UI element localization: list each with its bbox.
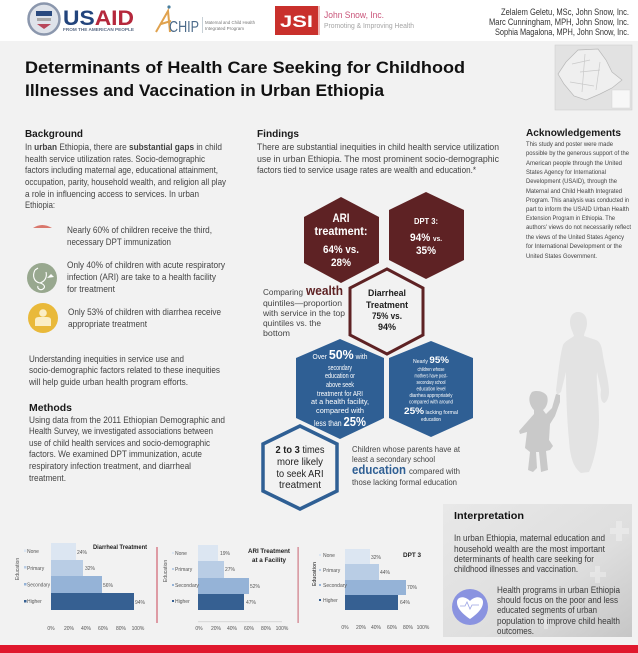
chart: ARI treatment at a facility: 40%: [227, 626, 238, 632]
hexagon: over 50%: secondary: [328, 365, 352, 372]
icon: doctor: [28, 303, 58, 333]
hexagon: 2 to 3 times: 2 to 3 times: [276, 444, 324, 456]
recommendation text: outcomes.: [497, 626, 534, 636]
hexagon: ARI treatment: 64% vs.: [323, 244, 359, 256]
hexagon: diarrheal treatment: 94%: [378, 322, 396, 332]
bullet: DPT: [67, 225, 212, 247]
chart: ARI treatment at a facility: 80%: [261, 626, 272, 632]
chart: DPT 3: None: [323, 553, 335, 559]
acknowledgements text: [526, 141, 631, 260]
icon: stethoscope: [27, 263, 57, 293]
hexagon: nearly 95%: secondary school: [416, 380, 446, 386]
divider line between charts: [298, 547, 299, 623]
hexagon: DPT 3: [389, 192, 464, 279]
recommendation text: educated segments of urban: [497, 605, 597, 615]
background text: occupation, parity, household wealth, and religion all play: [25, 177, 226, 187]
interpretation text: household wealth are the most important: [454, 544, 605, 554]
findings text: There are substantial inequities in child health service utilization: [257, 142, 499, 152]
methods text: use of child health services and socio-demographic: [29, 438, 210, 448]
title: Determinants of Health Care Seeking for Childhood: [25, 58, 465, 77]
hexagon: diarrheal treatment: Treatment: [366, 300, 408, 310]
hexagon: 2 to 3 times: treatment: [279, 479, 321, 491]
interpretation text: determinants of health care seeking for: [454, 554, 594, 564]
chart: DPT 3: 80%: [403, 625, 414, 631]
background text: a role in influencing access to services. In urban: [25, 189, 199, 199]
chart: diarrheal treatment: Secondary: [27, 582, 50, 588]
logo: iCHIP: Maternal and Child Health: [205, 20, 256, 25]
understanding text: Understanding inequities in service use and: [29, 354, 184, 364]
chart: diarrheal treatment: 32%: [85, 566, 96, 572]
chart: ARI treatment at a facility: None: [175, 551, 187, 557]
hexagon: over 50%: above seek: [326, 382, 354, 389]
wealth label: bottom: [263, 328, 290, 338]
chart: diarrheal treatment: None: [27, 549, 39, 555]
title: [25, 58, 465, 100]
bullet: diarrhea: Only 53% of children with diarrhea receive: [68, 307, 221, 317]
bullet: diarrhea: [68, 307, 221, 329]
wealth label: wealth: [305, 283, 343, 298]
logo: JSI: John Snow, Inc.: [324, 10, 384, 21]
heading: findings: Findings: [257, 128, 299, 140]
findings text: factors tied to service usage rates are wealth and education.*: [257, 165, 476, 175]
chart: diarrheal treatment: 94%: [135, 600, 146, 606]
bullet: diarrhea: appropriate treatment: [68, 319, 147, 329]
hexagon: 2 to 3 times: more likely: [277, 456, 324, 468]
chart: diarrheal treatment: 20%: [64, 626, 75, 632]
chart: DPT 3: 64%: [400, 600, 411, 606]
chart: diarrheal treatment: Diarrheal Treatment: [93, 544, 148, 551]
bullet: DPT: necessary DPT immunization: [67, 237, 171, 247]
chart: ARI treatment at a facility: Secondary: [175, 583, 199, 589]
logo: USAID: USAID: [63, 7, 134, 30]
hexagon: over 50%: at a health facility,: [311, 399, 369, 406]
chart: diarrheal treatment: 56%: [103, 583, 114, 589]
hexagon: nearly 95%: education level: [416, 386, 446, 392]
chart: ARI treatment at a facility: Higher: [175, 599, 190, 605]
panel: background: [25, 128, 226, 387]
understanding text: [28, 354, 220, 387]
hexagon: ARI treatment: treatment:: [314, 226, 368, 238]
methods text: respiratory infection treatment, and diarrheal: [29, 461, 191, 471]
methods text: [29, 415, 225, 483]
hexagon: nearly 95%: children whose: [418, 367, 445, 373]
panel: interpretation: [443, 504, 632, 637]
logo: JSI: [275, 6, 414, 35]
understanding text: will help guide urban health program efforts.: [28, 377, 188, 387]
hexagon: over 50%: compared with: [316, 408, 364, 415]
chart: ARI treatment at a facility: 100%: [276, 626, 289, 632]
heading: acknowledgements: Acknowledgements: [526, 127, 621, 139]
panel: methods: [29, 402, 225, 483]
hexagon: nearly 95%: 25% lacking formal: [404, 406, 458, 417]
logo: iCHIP: [156, 5, 256, 36]
hexagon: nearly 95%: education: [421, 417, 441, 423]
hexagon: nearly 95%: Nearly 95%: [413, 355, 450, 366]
chart: diarrheal treatment: 60%: [98, 626, 109, 632]
chart: diarrheal treatment: 0%: [47, 626, 55, 632]
logo: USAID: [28, 4, 134, 34]
hexagon: nearly 95%: compared with around: [409, 400, 453, 406]
logo: JSI: Promoting & Improving Health: [324, 23, 414, 30]
recommendation text: [497, 585, 621, 636]
background text: In urban Ethiopia, there are substantial gaps in child: [25, 142, 222, 152]
education label: those lacking formal education: [352, 477, 457, 487]
methods text: Health Survey, we investigated associations between: [29, 426, 213, 436]
acknowledgements text: Maternal and Child Health Integrated: [526, 188, 622, 195]
acknowledgements text: This study and poster were made: [526, 141, 613, 148]
acknowledgements text: States Agency for International: [526, 169, 606, 176]
chart: DPT 3: Primary: [323, 568, 341, 574]
education label: [352, 444, 461, 487]
chart: diarrheal treatment: 24%: [77, 550, 88, 556]
chart: ARI treatment at a facility: 52%: [250, 584, 261, 590]
chart: diarrheal treatment: Education: [15, 558, 21, 580]
background text: factors including maternal age, educational attainment,: [25, 165, 218, 175]
hexagon: over 50%: treatment for ARI: [317, 391, 363, 398]
acknowledgements text: United States Government.: [526, 253, 597, 260]
acknowledgements text: American people through the United: [526, 160, 622, 167]
bullet: DPT: Nearly 60% of children receive the third,: [67, 225, 212, 235]
wealth label: with service in the top: [262, 308, 345, 318]
logo: JSI: JSI: [280, 12, 313, 31]
hexagon: 2 to 3 times: to seek ARI: [276, 468, 324, 480]
chart: DPT 3: 60%: [387, 625, 398, 631]
chart: ARI treatment at a facility: Primary: [175, 567, 193, 573]
footer bar: [0, 645, 638, 653]
wealth label: quintiles vs. the: [263, 318, 321, 328]
panel: acknowledgements: [526, 127, 631, 260]
chart: DPT 3: 0%: [341, 625, 349, 631]
interpretation text: childhood illnesses and vaccination.: [454, 564, 578, 574]
bullet: ARI: Only 40% of children with acute respiratory: [67, 260, 225, 270]
chart: ARI treatment at a facility: [163, 545, 291, 632]
chart: DPT 3: 70%: [407, 585, 418, 591]
methods text: treatment.: [29, 473, 66, 483]
chart: ARI treatment at a facility: ARI Treatment: [248, 548, 291, 555]
chart: DPT 3: 44%: [380, 570, 391, 576]
chart: DPT 3: [312, 549, 430, 631]
chart: ARI treatment at a facility: 27%: [225, 567, 236, 573]
chart: diarrheal treatment: 80%: [116, 626, 127, 632]
logo: USAID: FROM THE AMERICAN PEOPLE: [63, 27, 134, 32]
icon: immunization (cropped): [33, 225, 52, 228]
bullet: ARI: infection (ARI) are take to a health facility: [67, 272, 216, 282]
chart: diarrheal treatment: [15, 543, 148, 632]
divider line between charts: [156, 547, 158, 623]
hexagon: over 50%: education or: [325, 373, 356, 380]
hexagon: DPT 3: 94% vs.: [410, 232, 442, 244]
chart: ARI treatment at a facility: 0%: [195, 626, 203, 632]
hexagon: nearly 95%: [389, 341, 473, 437]
map of Ethiopia: [555, 45, 632, 110]
heading: interpretation: Interpretation: [454, 511, 524, 522]
hexagon: nearly 95%: mothers have post-: [414, 374, 448, 380]
authors: [489, 7, 629, 37]
logo: iCHIP: CHIP: [169, 19, 199, 36]
wealth label: [262, 283, 345, 338]
background text: Ethiopia:: [25, 200, 55, 210]
wealth label: quintiles—proportion: [263, 298, 342, 308]
hexagon: over 50%: [296, 339, 384, 439]
recommendation text: population to improve child health: [497, 616, 620, 626]
hexagon: nearly 95%: diarrhea appropriately: [410, 393, 453, 399]
chart: diarrheal treatment: Primary: [27, 566, 45, 572]
hexagon: 2 to 3 times: [263, 426, 337, 509]
acknowledgements text: Extension Program in Ethiopia. The: [526, 215, 615, 222]
chart: DPT 3: Education: [312, 562, 318, 586]
chart: DPT 3: 100%: [417, 625, 430, 631]
chart: DPT 3: DPT 3: [403, 552, 421, 559]
acknowledgements text: the views of the United States Agency: [526, 234, 625, 241]
hexagon: ARI treatment: [304, 197, 379, 283]
background text: [25, 142, 226, 210]
icon: heart: [452, 589, 488, 625]
education label: Children whose parents have at: [352, 444, 461, 454]
chart: ARI treatment at a facility: 19%: [220, 551, 231, 557]
panel: findings: [257, 128, 499, 175]
hexagon: DPT 3: 35%: [416, 245, 436, 257]
chart: ARI treatment at a facility: 47%: [246, 600, 257, 606]
education label: least a secondary school: [352, 454, 435, 464]
hexagon: diarrheal treatment: [350, 269, 423, 354]
chart: diarrheal treatment: 100%: [132, 626, 145, 632]
methods text: factors. We examined DPT immunization, acute: [29, 449, 202, 459]
background text: health service utilization rates. Socio-demographic: [25, 154, 205, 164]
recommendation text: Health programs in urban Ethiopia: [497, 585, 621, 595]
education label: compared with: [409, 466, 460, 476]
chart: DPT 3: 32%: [371, 555, 382, 561]
hexagon: over 50%: less than 25%: [314, 414, 366, 429]
chart: diarrheal treatment: 40%: [81, 626, 92, 632]
chart: ARI treatment at a facility: 20%: [211, 626, 222, 632]
acknowledgements text: part to inform the USAID Urban Health: [526, 206, 629, 213]
hexagon: diarrheal treatment: Diarrheal: [368, 288, 406, 298]
interpretation text: [454, 533, 605, 574]
chart: DPT 3: Secondary: [323, 583, 347, 589]
chart: ARI treatment at a facility: at a Facility: [252, 557, 286, 564]
wealth label: Comparing: [263, 287, 303, 297]
chart: DPT 3: Higher: [323, 598, 338, 604]
bullet: ARI: for treatment: [67, 284, 115, 294]
hexagon: over 50%: Over 50% with: [312, 347, 368, 362]
bullet: ARI: [67, 260, 225, 294]
hexagon: ARI treatment: 28%: [331, 257, 351, 269]
hexagon: DPT 3: DPT 3:: [414, 217, 438, 226]
findings text: use in urban Ethiopia. The most prominent socio-demographic: [257, 154, 499, 164]
recommendation text: should focus on the poor and less: [497, 595, 618, 605]
acknowledgements text: for International Development or the: [526, 243, 622, 250]
interpretation text: In urban Ethiopia, maternal education and: [454, 533, 605, 543]
chart: DPT 3: 20%: [356, 625, 367, 631]
heading: background: Background: [25, 128, 83, 140]
methods text: Using data from the 2011 Ethiopian Demographic and: [29, 415, 225, 425]
hexagon: ARI treatment: ARI: [332, 213, 350, 225]
understanding text: socio-demographic factors related to these inequities: [29, 365, 220, 375]
findings text: [257, 142, 499, 175]
hexagon: diarrheal treatment: 75% vs.: [372, 311, 402, 321]
chart: diarrheal treatment: Higher: [27, 599, 42, 605]
silhouette: mother and child: [519, 312, 609, 473]
chart: ARI treatment at a facility: Education: [163, 560, 169, 582]
chart: ARI treatment at a facility: 60%: [244, 626, 255, 632]
education label: education: [352, 462, 406, 477]
chart: DPT 3: 40%: [371, 625, 382, 631]
title: Illnesses and Vaccination in Urban Ethiopia: [25, 81, 385, 100]
heading: methods: Methods: [29, 402, 72, 414]
logo: iCHIP: Integrated Program: [205, 26, 244, 31]
acknowledgements text: Development (USAID), through the: [526, 178, 617, 185]
